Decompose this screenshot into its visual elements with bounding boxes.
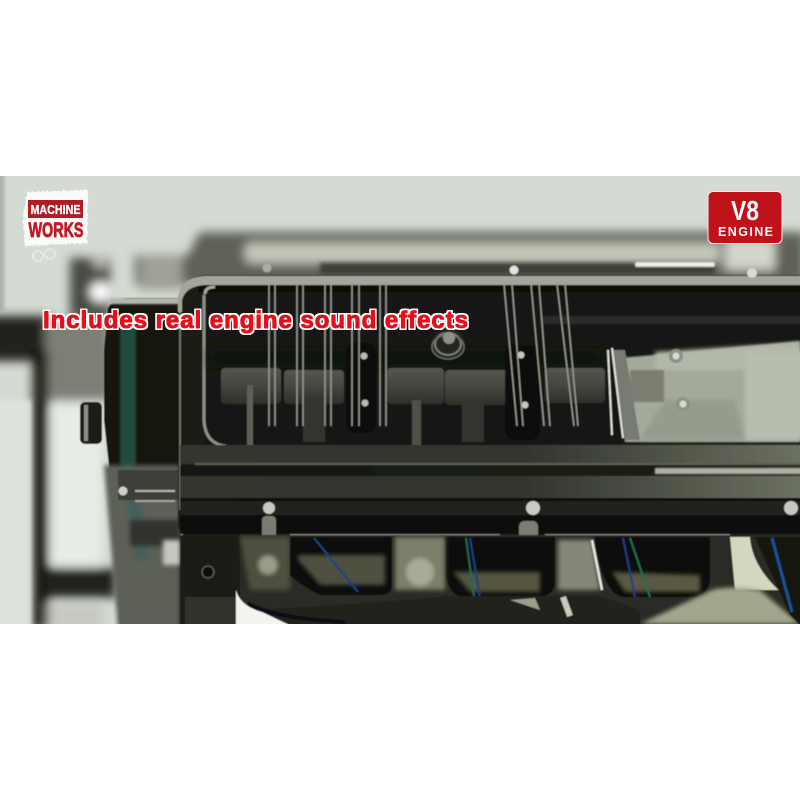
blurred rear engine: [135, 232, 800, 290]
chrome screws along top: [262, 264, 757, 278]
lower left block: [180, 535, 240, 630]
camshaft lobes: [221, 350, 664, 446]
chrome base: [262, 595, 640, 624]
intake manifold: [240, 535, 800, 630]
shaft end: [80, 402, 102, 444]
badge: V8 ENGINE: V8: [731, 195, 759, 226]
bright reflection area: [612, 341, 800, 442]
cover screws: [262, 501, 798, 541]
cover body: [178, 275, 800, 540]
vertical ribs: [269, 284, 623, 438]
oil cap nut: [431, 329, 465, 359]
inner window: [205, 292, 800, 446]
lower cover bands: [180, 445, 800, 464]
blurred pulley and shaft: [0, 255, 116, 630]
front housing: [104, 298, 180, 630]
coloured wires: [314, 538, 792, 612]
caption: Includes real engine sound effects: [43, 307, 468, 334]
dark bracket with screws: [346, 343, 376, 433]
engine photo scene with logos and caption: [0, 176, 800, 624]
badge: V8 ENGINE: [708, 192, 782, 244]
logo: MACHINE WORKS: WORKS: [28, 219, 84, 242]
badge: V8 ENGINE: ENGINE: [718, 225, 773, 239]
photo: transparent V8 engine: [0, 170, 800, 630]
logo: MACHINE WORKS: [23, 190, 88, 261]
logo: MACHINE WORKS: MACHINE: [30, 203, 80, 217]
